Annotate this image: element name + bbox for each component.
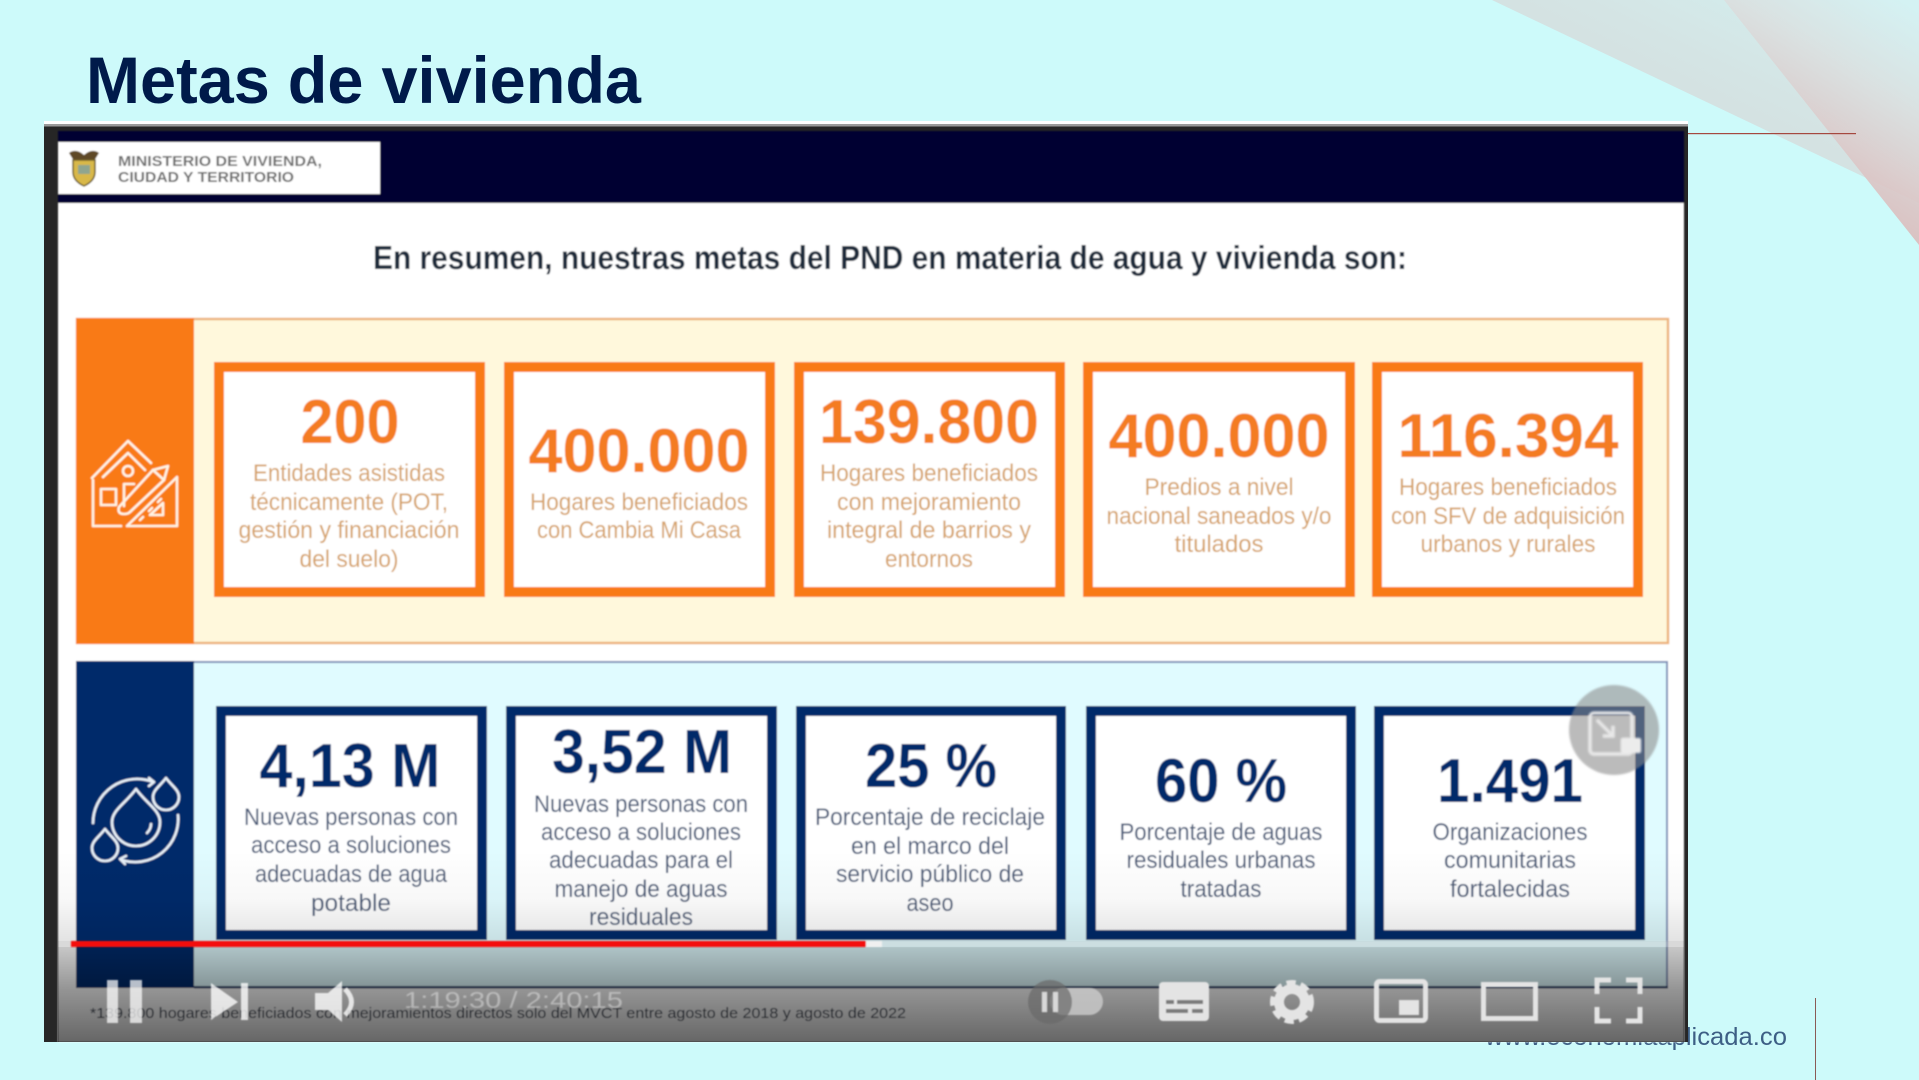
panel: agua <box>76 661 1668 988</box>
card: 400.000 predios <box>1088 367 1350 592</box>
decorative corner: pink triangle <box>1724 0 1919 245</box>
card: 60 %: residuales urbanas <box>1126 847 1316 874</box>
progress bar <box>71 941 1668 947</box>
card: 400.000 Cambia Mi Casa: Hogares beneficiados <box>530 489 748 516</box>
footer vertical rule <box>1815 998 1816 1080</box>
card: 200: 200 <box>300 388 400 457</box>
card: 139.800: entornos <box>885 546 973 573</box>
icon: colombian crest <box>69 151 99 186</box>
card: 139.800: 139.800 <box>819 388 1039 457</box>
card: 116.394: con SFV de adquisición <box>1391 503 1625 530</box>
card: 3,52 M: adecuadas para el <box>549 847 733 874</box>
card: 25 %: servicio público de <box>836 861 1024 888</box>
icon: house with pencil and ruler <box>92 441 177 526</box>
card: 60 %: Porcentaje de aguas <box>1120 819 1322 846</box>
time readout: 1:19:30 / 2:40:15 <box>404 987 623 1013</box>
card: 139.800: con mejoramiento <box>837 489 1021 516</box>
card: 25 %: 25 % <box>865 732 997 801</box>
card: 400.000 Cambia Mi Casa: 400.000 <box>528 417 750 486</box>
card: 200: Entidades asistidas <box>253 460 445 487</box>
card: 3,52 M: 3,52 M <box>552 718 732 787</box>
icon: water drops cycle <box>92 778 179 864</box>
card: 116.394: urbanos y rurales <box>1420 531 1596 558</box>
card: 3,52 M: acceso a soluciones <box>541 819 741 846</box>
next button <box>211 983 248 1020</box>
card: 25 %: en el marco del <box>851 833 1009 860</box>
card: 4,13 M: 4,13 M <box>260 732 440 801</box>
player gradient overlay <box>58 850 1684 1042</box>
card: 3,52 M <box>511 711 772 935</box>
card: 4,13 M <box>221 711 482 935</box>
pause button <box>107 980 142 1023</box>
card: 60 % <box>1091 711 1351 935</box>
card: 1.491: Organizaciones <box>1432 819 1588 846</box>
card: 139.800: integral de barrios y <box>827 517 1031 544</box>
miniplayer button <box>1376 982 1426 1020</box>
card: 400.000 predios: Predios a nivel <box>1144 474 1294 501</box>
subtitles button <box>1159 982 1209 1021</box>
card: 60 %: 60 % <box>1155 747 1287 816</box>
video frame <box>44 121 1688 1042</box>
ministry name: MINISTERIO DE VIVIENDA, <box>118 154 322 170</box>
card: 4,13 M: acceso a soluciones <box>251 832 451 859</box>
card: 1.491: fortalecidas <box>1450 876 1570 903</box>
card: 200 <box>219 367 480 592</box>
ministry logo box <box>58 142 380 194</box>
fullscreen button <box>1597 980 1640 1021</box>
theater button <box>1484 984 1536 1018</box>
card: 400.000 predios: nacional saneados y/o <box>1106 503 1332 530</box>
title: Metas de vivienda <box>86 43 642 117</box>
card: 400.000 Cambia Mi Casa <box>509 367 770 592</box>
slide navy header <box>58 131 1684 203</box>
card: 4,13 M: potable <box>311 890 391 917</box>
card: 25 %: aseo <box>906 890 954 917</box>
card: 4,13 M: adecuadas de agua <box>255 861 448 888</box>
card: 116.394: Hogares beneficiados <box>1399 474 1617 501</box>
panel: vivienda <box>76 318 1668 644</box>
card: 3,52 M: Nuevas personas con <box>534 791 748 818</box>
card: 1.491: comunitarias <box>1444 847 1576 874</box>
card: 3,52 M: residuales <box>589 904 693 931</box>
card: 200: técnicamente (POT, <box>250 489 448 516</box>
card: 3,52 M: manejo de aguas <box>554 876 728 903</box>
volume button <box>315 981 352 1022</box>
website footer text: www.economiaaplicada.co <box>1484 1023 1787 1051</box>
pop-out circle button <box>1569 685 1659 775</box>
card: 25 %: Porcentaje de reciclaje <box>815 804 1045 831</box>
card: 400.000 Cambia Mi Casa: con Cambia Mi Casa <box>537 517 742 544</box>
card: 4,13 M: Nuevas personas con <box>244 804 458 831</box>
card: 1.491: 1.491 <box>1437 747 1583 816</box>
embedded slide <box>58 131 1684 1042</box>
ministry logo box: CIUDAD Y TERRITORIO <box>118 170 294 186</box>
card: 139.800 <box>799 367 1060 592</box>
card: 400.000 predios: 400.000 <box>1108 402 1330 471</box>
card: 139.800: Hogares beneficiados <box>820 460 1038 487</box>
decorative corner: large grey triangle <box>1492 0 1919 203</box>
settings gear <box>1273 983 1311 1021</box>
slide heading: En resumen, nuestras metas del PND en materia de agua y vivienda son: <box>373 239 1407 276</box>
card: 200: gestión y financiación <box>238 517 460 544</box>
header rule <box>1688 133 1856 134</box>
slide footnote: *139.800 hogares beneficiados con mejoramientos directos solo del MVCT entre agosto de 2018 y agosto de 2022 <box>90 1005 906 1022</box>
video controls <box>71 941 1668 1024</box>
card: 60 %: tratadas <box>1180 876 1262 903</box>
card: 25 % <box>801 711 1061 935</box>
card: 116.394 <box>1377 367 1638 592</box>
card: 116.394: 116.394 <box>1398 402 1619 471</box>
card: 1.491 <box>1379 711 1640 935</box>
card: 200: del suelo) <box>300 546 398 573</box>
autoplay toggle <box>1028 980 1103 1024</box>
card: 400.000 predios: titulados <box>1174 531 1264 558</box>
